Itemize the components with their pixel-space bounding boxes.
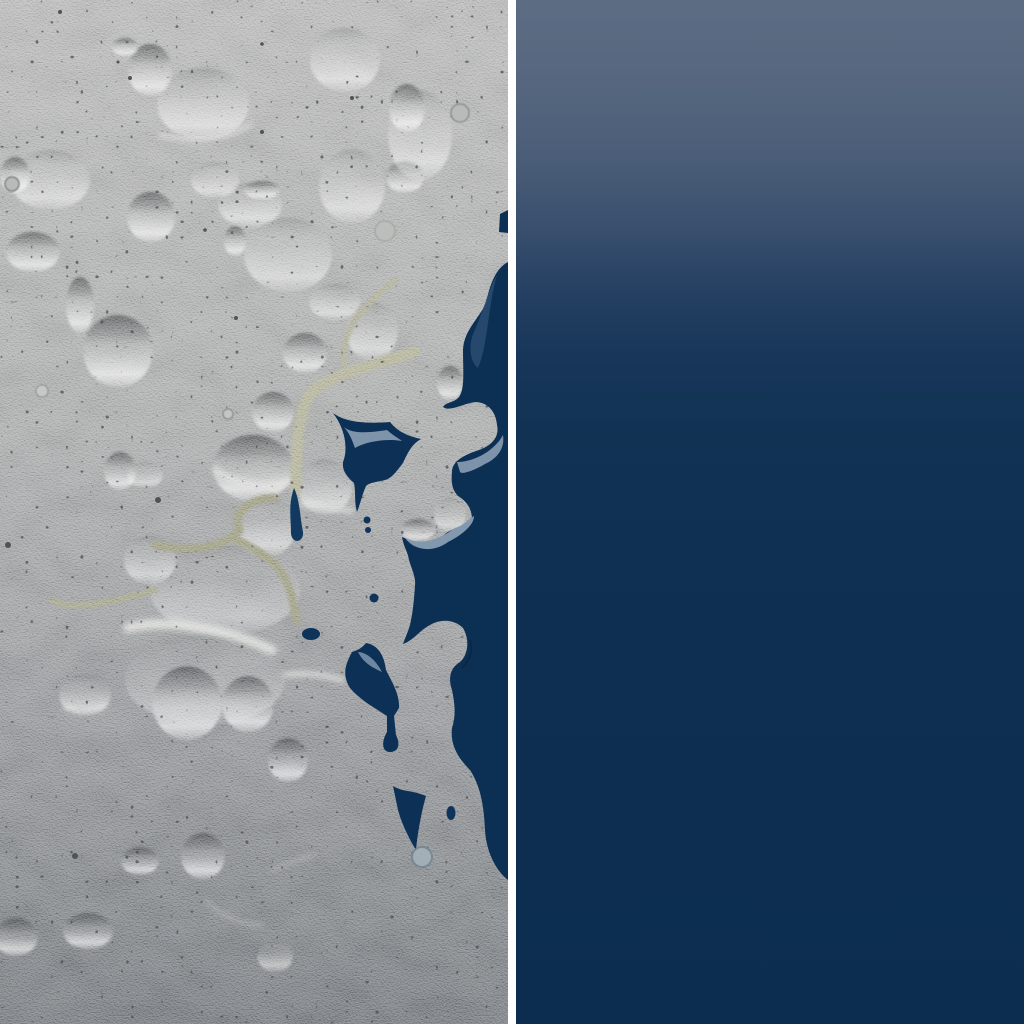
- paint: bottom splash: [393, 786, 432, 867]
- paint: thin drip on vein: [290, 488, 303, 541]
- highlight: upper splash sheen: [344, 427, 402, 448]
- specks: [5, 10, 354, 859]
- panel: concrete texture: [0, 0, 508, 1024]
- panel: navy gradient: [516, 0, 1024, 1024]
- highlight: lower crescent: [405, 516, 474, 549]
- paint: upper splash: [333, 413, 421, 512]
- highlight: top lobe sheen: [471, 275, 497, 368]
- water beads: [5, 104, 469, 419]
- paint: small droplets: [302, 516, 456, 820]
- ridges: bright relief crests: [65, 125, 352, 925]
- highlight: upper crescent: [457, 435, 503, 473]
- craters: [0, 28, 466, 972]
- paint: lower splash: [345, 643, 399, 752]
- texture: dark aggregate specks: [0, 0, 508, 1024]
- texture: concrete grain: [0, 0, 508, 1024]
- stain: pale resin veins: [52, 280, 415, 620]
- highlight: lower splash sheen: [358, 652, 382, 672]
- paint: main edge pool: [402, 210, 508, 880]
